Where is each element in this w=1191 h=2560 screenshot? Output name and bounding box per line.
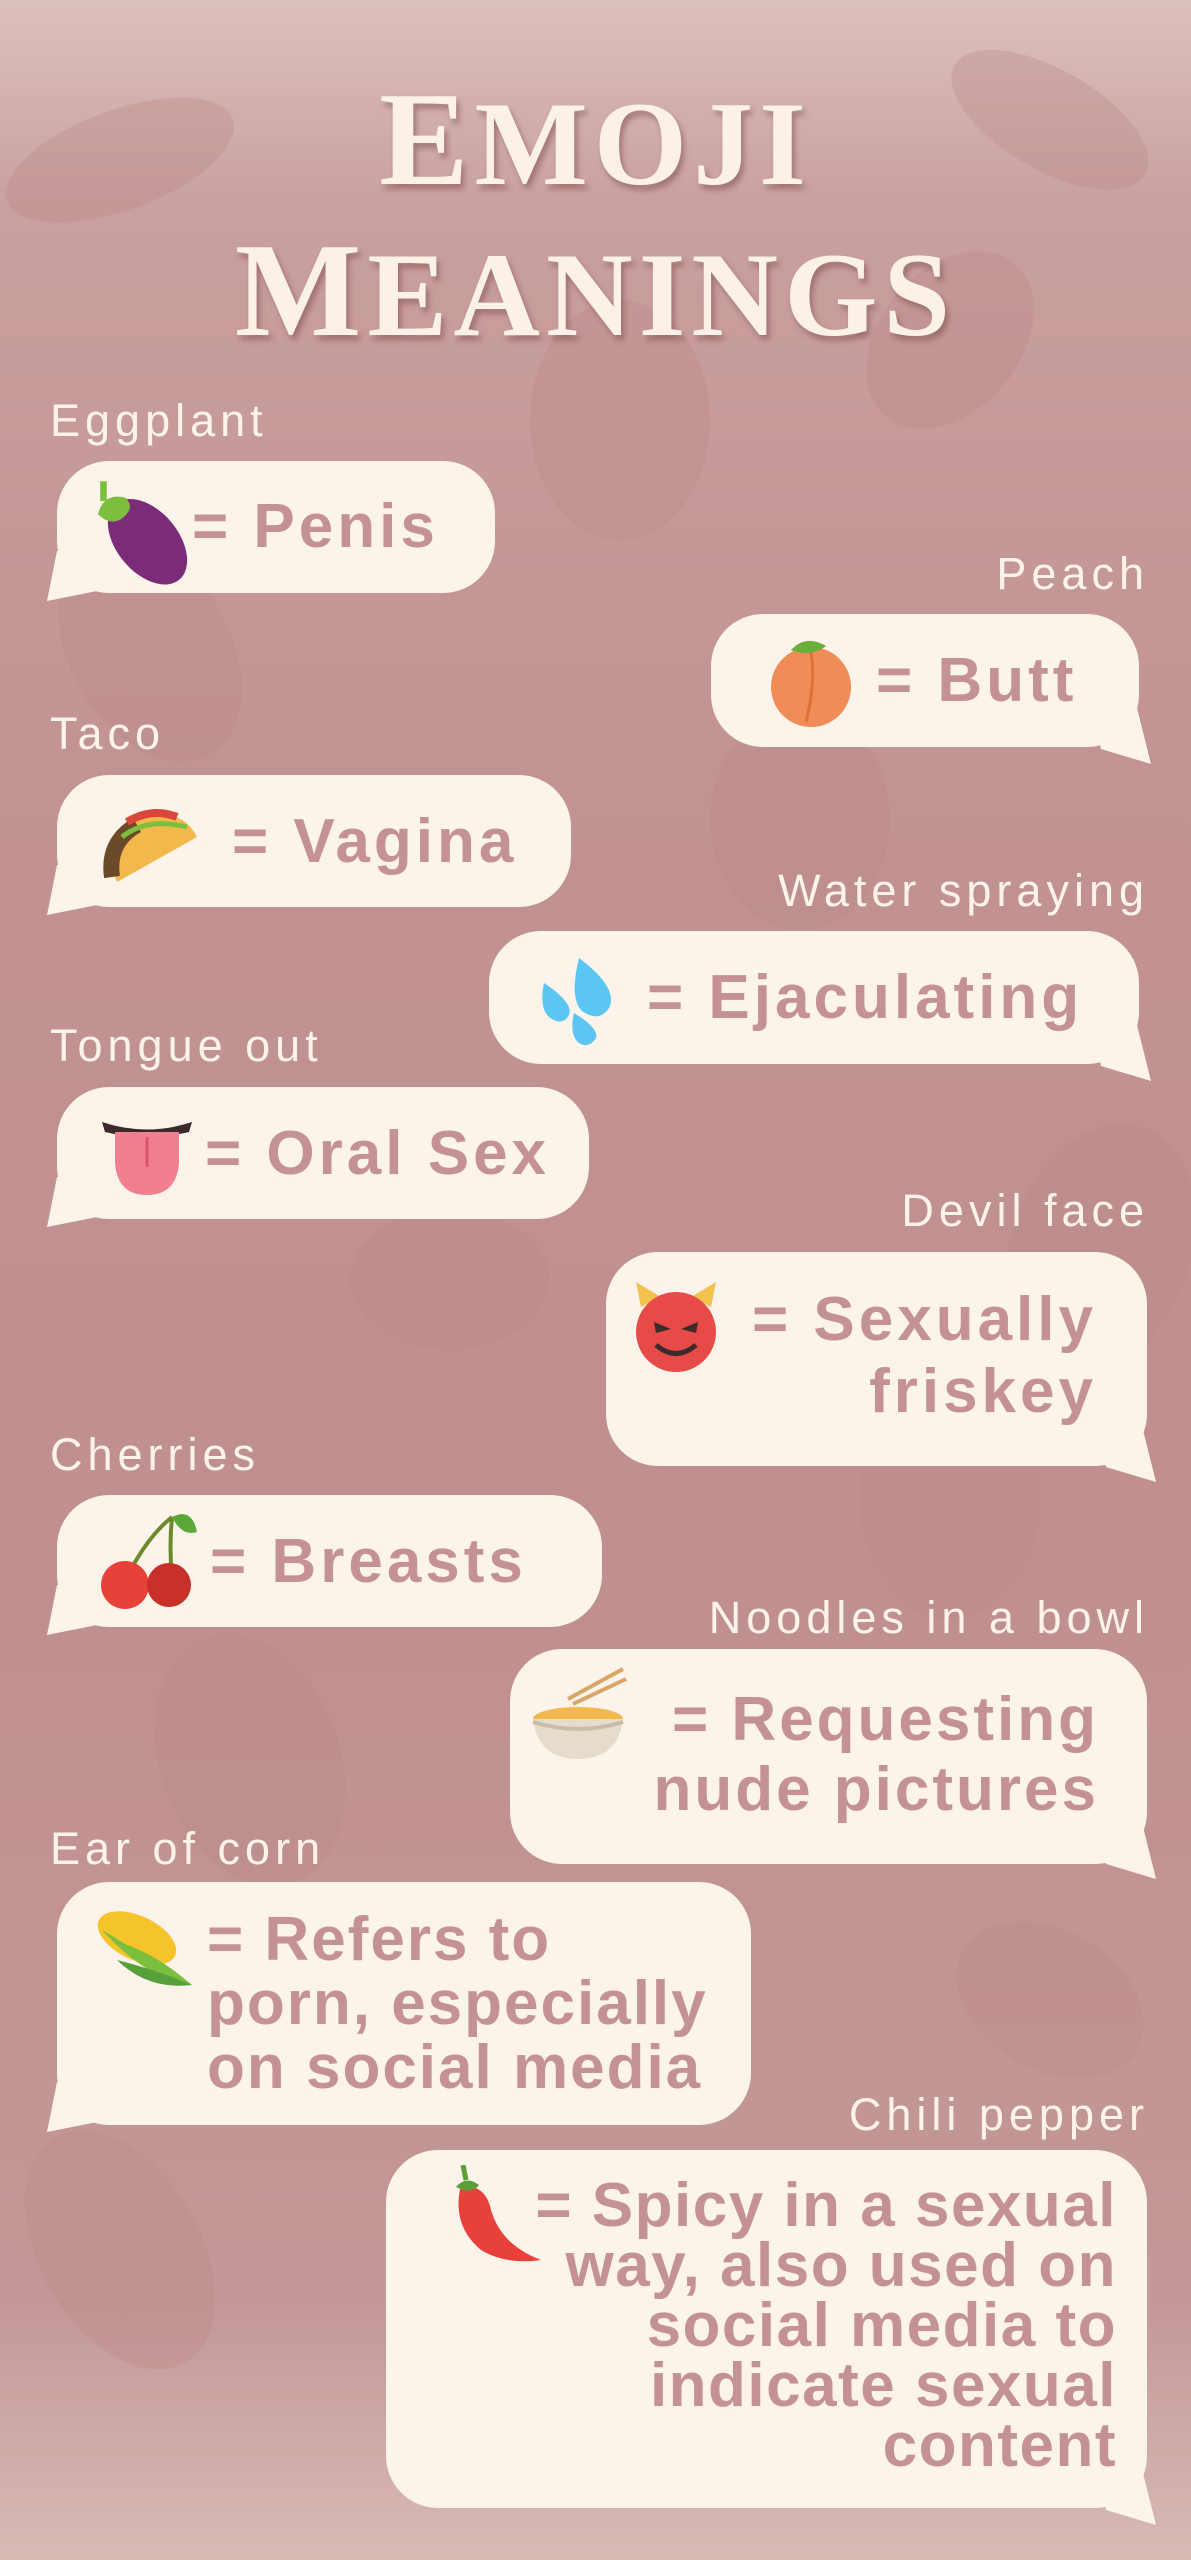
bubble: chili pepper: indicate sexual [650,2351,1117,2420]
bubble: cherries: = Breasts [210,1527,527,1596]
bubble: corn [47,1882,751,2132]
bubble: tongue out: = Oral Sex [205,1119,550,1188]
bubble: corn: porn, especially [207,1969,708,2038]
label: Peach: Peach [996,548,1149,599]
bubble: peach: = Butt [876,646,1077,715]
bubble: chili pepper: way, also used on [565,2231,1117,2300]
bubble: eggplant [47,461,495,601]
bubble: noodles [510,1649,1156,1879]
label: Eggplant: Eggplant [50,395,268,446]
label: Chili pepper: Chili pepper [849,2089,1149,2140]
icon: corn [98,1911,192,1986]
bubble: taco: = Vagina [232,807,517,876]
icon: water drops [542,958,611,1046]
bubble: devil face: = Sexually [752,1285,1097,1354]
bubble: cherries [47,1495,602,1635]
bubble: tongue out [47,1087,589,1227]
icon: chili pepper [456,2165,541,2262]
bubble: chili pepper [386,2150,1156,2525]
title: EMOJI [379,65,812,213]
bubble: noodles: nude pictures [653,1755,1099,1824]
bubble: water spraying: = Ejaculating [647,963,1083,1032]
icon: cherries [101,1514,197,1609]
bubble: eggplant: = Penis [192,492,439,561]
bubble: noodles: = Requesting [672,1685,1099,1754]
bubble: peach [711,614,1151,764]
bubble: devil face [606,1252,1156,1482]
icon: peach [771,640,851,727]
title [235,65,956,364]
label: Ear of corn: Ear of corn [50,1823,325,1874]
icon: devil [636,1282,716,1372]
bubble: corn: on social media [207,2033,702,2102]
bubble: chili pepper: = Spicy in a sexual [535,2171,1117,2240]
label: Cherries: Cherries [50,1429,260,1480]
bubble: corn: = Refers to [207,1905,551,1974]
label: Taco: Taco [50,708,165,759]
icon: noodles [532,1667,627,1759]
icon: eggplant [98,481,188,584]
bubble: chili pepper: social media to [647,2291,1117,2360]
icon: tongue [102,1122,192,1195]
bubble: chili pepper: content [883,2411,1117,2480]
bubble: devil face: friskey [869,1357,1097,1426]
label: Tongue out: Tongue out [50,1020,323,1071]
label: Devil face: Devil face [901,1185,1149,1236]
title: MEANINGS [235,216,956,364]
label: Noodles in a bowl: Noodles in a bowl [709,1592,1149,1643]
label: Water spraying: Water spraying [778,865,1149,916]
bubble: water spraying [489,931,1151,1081]
icon: taco [103,809,197,882]
bubble: taco [47,775,571,915]
